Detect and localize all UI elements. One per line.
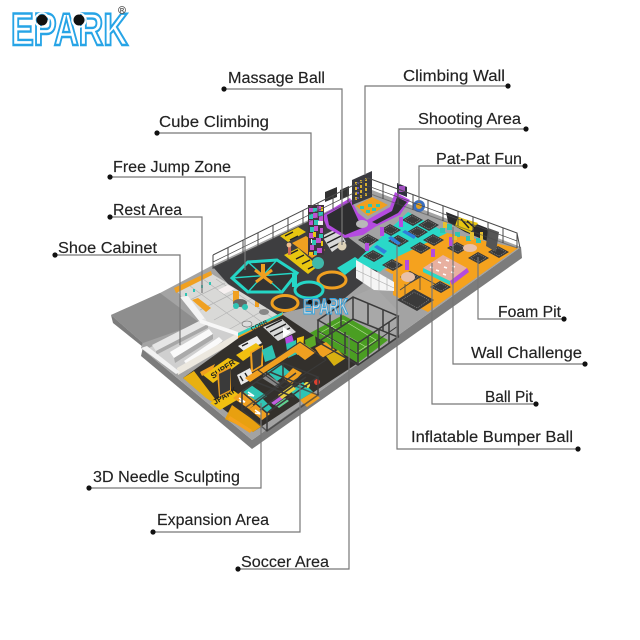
foam cubes: [356, 197, 388, 228]
label: Foam Pit: Foam Pit: [498, 304, 562, 321]
adventure zone floor: [183, 315, 358, 433]
perimeter fences: [213, 178, 520, 298]
label: 3D Needle Sculpting: 3D Needle Sculpting: [93, 469, 240, 486]
label: Massage Ball: Massage Ball: [228, 70, 325, 87]
label: Foam Pit: [478, 257, 567, 322]
purple ramps: [322, 192, 410, 238]
label: Wall Challenge: [453, 227, 588, 367]
label: Climbing Wall: [365, 68, 511, 175]
label: Ball Pit: [432, 263, 539, 407]
massage ball and sphere: [312, 242, 346, 269]
label: Rest Area: [107, 202, 202, 293]
label: Cube Climbing: [154, 114, 311, 205]
concrete slab base: [111, 190, 522, 449]
label: Inflatable Bumper Ball: [397, 245, 581, 452]
purple posts: [365, 217, 453, 270]
wall challenge corner: [440, 212, 499, 252]
adventure zone cage: [242, 342, 326, 431]
trampoline grid: [358, 214, 509, 311]
shoe cabinet room: [141, 318, 238, 375]
watermark logo: [303, 294, 348, 319]
label: Ball Pit: Ball Pit: [485, 389, 534, 406]
label: Free Jump Zone: [107, 159, 245, 270]
label: Wall Challenge: Wall Challenge: [471, 345, 582, 362]
round trampolines: [272, 272, 346, 310]
label: Inflatable Bumper Ball: Inflatable Bumper Ball: [411, 429, 573, 446]
orange pillars with black panels: [200, 345, 263, 397]
label: Pat-Pat Fun: [419, 151, 528, 202]
plain gray expansion floor: [343, 287, 400, 333]
ball pit: [401, 244, 477, 285]
white wall: [356, 260, 394, 291]
label: Climbing Wall: Climbing Wall: [403, 68, 505, 85]
climbing wall: [352, 171, 372, 205]
label: Shooting Area: [399, 111, 529, 185]
floor plan scene: [111, 171, 522, 449]
dark free jump floor: [213, 216, 385, 341]
label: Rest Area: Rest Area: [113, 202, 182, 219]
logo: EPARK: EPARK: [11, 4, 128, 55]
free jump hexagon trampoline: [232, 260, 297, 292]
soccer field: [310, 315, 388, 363]
label: Massage Ball: [221, 70, 342, 245]
adventure zone floor: SUPER: [209, 358, 237, 381]
label: Expansion Area: [150, 383, 300, 535]
logo: EPARK: R: [120, 8, 125, 14]
label: Expansion Area: Expansion Area: [157, 512, 269, 529]
inflatable bumper blocks: [374, 230, 416, 254]
label: Pat-Pat Fun: Pat-Pat Fun: [436, 151, 522, 168]
label: 3D Needle Sculpting: [86, 403, 261, 491]
label: Shooting Area: Shooting Area: [418, 111, 521, 128]
watermark logo: EPARK: [303, 294, 348, 319]
label: Cube Climbing: Cube Climbing: [159, 114, 269, 131]
adventure zone floor: JPARK: [211, 385, 239, 407]
label: Shoe Cabinet: Shoe Cabinet: [58, 240, 158, 257]
shooting and wall panels: [325, 183, 425, 212]
label: Soccer Area: Soccer Area: [241, 554, 329, 571]
soccer cage: [318, 297, 398, 365]
colored activity blocks: [233, 343, 320, 420]
cube climbing tower: [308, 205, 324, 255]
label: Shoe Cabinet: [52, 240, 180, 345]
label: Free Jump Zone: Free Jump Zone: [113, 159, 231, 176]
trampoline area floors: [337, 212, 518, 312]
dark free jump floor: COBB: [250, 320, 269, 333]
yellow platform: [280, 227, 346, 274]
label: Soccer Area: [235, 335, 349, 572]
rest area tile floor: [174, 271, 280, 335]
